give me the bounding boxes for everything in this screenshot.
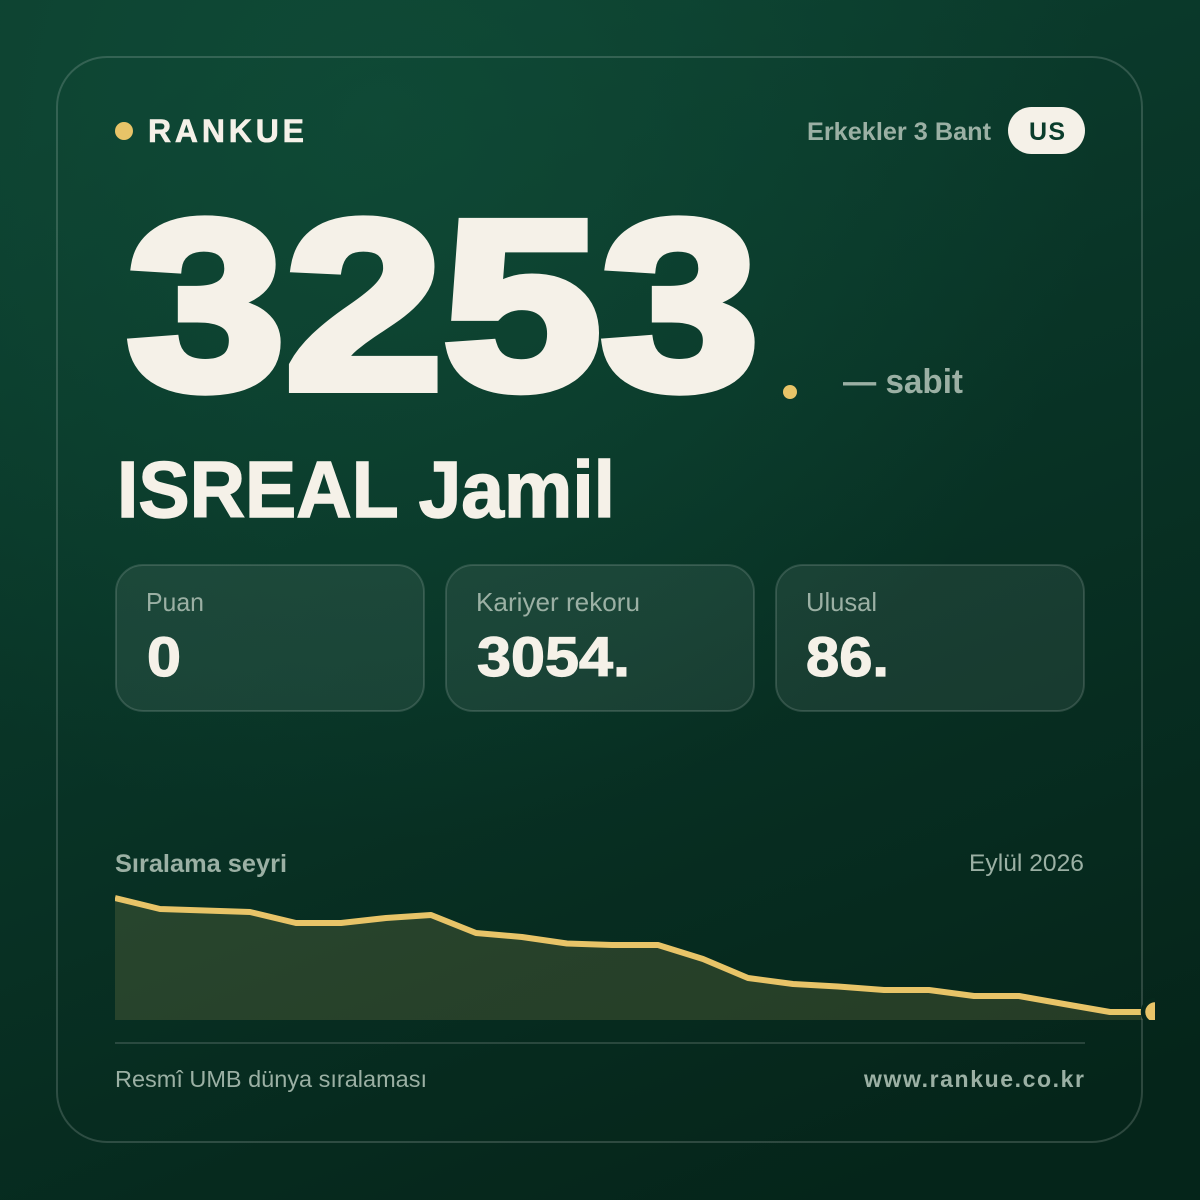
rank change label: — sabit xyxy=(843,363,963,401)
stat card: points xyxy=(116,565,424,711)
stat card: national rank xyxy=(776,565,1084,711)
header: category and country badge xyxy=(807,107,1085,154)
footer divider xyxy=(115,1042,1085,1044)
stat card: national rank: 86. xyxy=(806,625,889,688)
chart date: Eylül 2026 xyxy=(969,850,1084,877)
big rank number: 3253 xyxy=(127,171,759,439)
chart heading: Sıralama seyri xyxy=(115,850,287,878)
player name: ISREAL Jamil xyxy=(117,445,615,534)
accent dot xyxy=(783,385,797,399)
ranking trend chart xyxy=(115,898,1167,1024)
stat card: national rank: Ulusal xyxy=(806,587,877,617)
stat card: career high: Kariyer rekoru xyxy=(476,587,640,617)
header: category and country badge: Erkekler 3 Bant xyxy=(807,118,992,146)
stat card: career high: 3054. xyxy=(477,625,630,688)
footer website: www.rankue.co.kr xyxy=(863,1066,1084,1092)
stat card: points: Puan xyxy=(146,587,204,617)
footer source note: Resmî UMB dünya sıralaması xyxy=(115,1066,427,1092)
header: category and country badge: US xyxy=(1029,118,1065,146)
stat card: points: 0 xyxy=(147,625,181,688)
stat card: career high xyxy=(446,565,754,711)
header: brand logo: RANKUE xyxy=(148,113,304,149)
